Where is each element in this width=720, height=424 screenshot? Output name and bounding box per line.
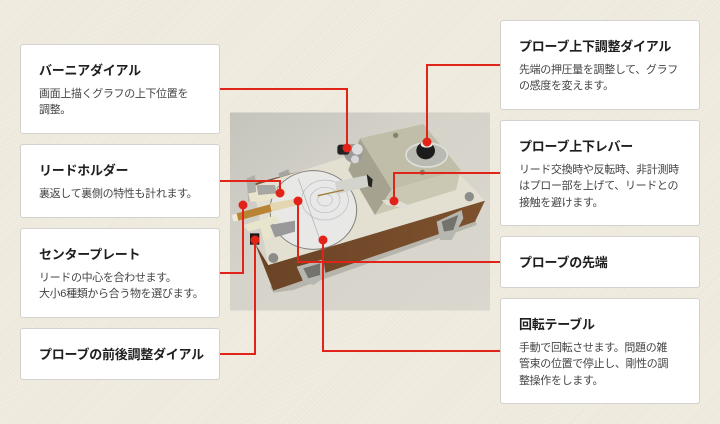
text: の感度を変えます。 — [519, 80, 614, 92]
wood front — [255, 201, 485, 291]
text: 管束の位置で停止し、剛性の調 — [519, 358, 668, 370]
heading: プローブ上下調整ダイアル — [519, 39, 671, 54]
panel: プローブ上下レバー — [500, 120, 700, 226]
panel: バーニアダイアル — [20, 44, 220, 134]
heading: センタープレート — [39, 247, 140, 262]
text: 整操作をします。 — [519, 375, 603, 387]
protractor — [270, 171, 357, 249]
panel: センタープレート — [20, 228, 220, 318]
heading: プローブの前後調整ダイアル — [39, 347, 204, 362]
panel: リードホルダー — [20, 144, 220, 218]
connector: 回転テーブル — [320, 236, 501, 351]
latches — [437, 210, 463, 240]
plate — [256, 157, 485, 265]
vernier dial — [344, 144, 363, 163]
connector: リードホルダー — [219, 181, 284, 196]
heading: バーニアダイアル — [39, 63, 141, 78]
text — [39, 272, 203, 300]
text: リード交換時や反転時、非計測時 — [519, 164, 679, 176]
wood back edge — [256, 170, 304, 186]
lead — [232, 205, 271, 222]
connector: プローブ上下レバー — [390, 173, 501, 204]
connector: プローブの先端 — [294, 198, 501, 262]
text: 接触を避けます。 — [519, 197, 603, 209]
panel: 回転テーブル — [500, 298, 700, 404]
text: リードの中心を合わせます。 — [39, 272, 176, 284]
connector: センタープレート — [219, 202, 246, 273]
panel: プローブの先端 — [500, 236, 700, 288]
text: はプロー部を上げて、リードとの — [519, 180, 678, 192]
lead holder — [247, 175, 257, 202]
text: 手動で回転させます。問題の雑 — [519, 342, 667, 354]
panel: プローブの前後調整ダイアル — [20, 328, 220, 380]
photo: probe apparatus — [230, 112, 490, 310]
text: 裏返して裏側の特性も計れます。 — [39, 188, 197, 200]
text: 先端の押圧量を調整して、グラフ — [519, 64, 678, 76]
text: 大小6種類から合う物を選びます。 — [39, 288, 203, 300]
text — [519, 64, 678, 92]
connector: プローブ上下調整ダイアル — [424, 65, 501, 146]
heading: 回転テーブル — [519, 317, 595, 332]
probe arm — [335, 175, 371, 194]
text: 画面上描くグラフの上下位置を — [39, 88, 188, 100]
connector: プローブの前後調整ダイアル — [219, 236, 258, 354]
heading: プローブの先端 — [519, 255, 607, 270]
text — [519, 164, 679, 209]
gray box — [348, 138, 392, 215]
text: 調整。 — [39, 104, 71, 116]
connector: バーニアダイアル — [219, 89, 350, 152]
heading: プローブ上下レバー — [519, 139, 633, 154]
panel: プローブ上下調整ダイアル — [500, 20, 700, 110]
text — [519, 342, 668, 387]
heading: リードホルダー — [39, 163, 128, 178]
text — [39, 88, 188, 116]
